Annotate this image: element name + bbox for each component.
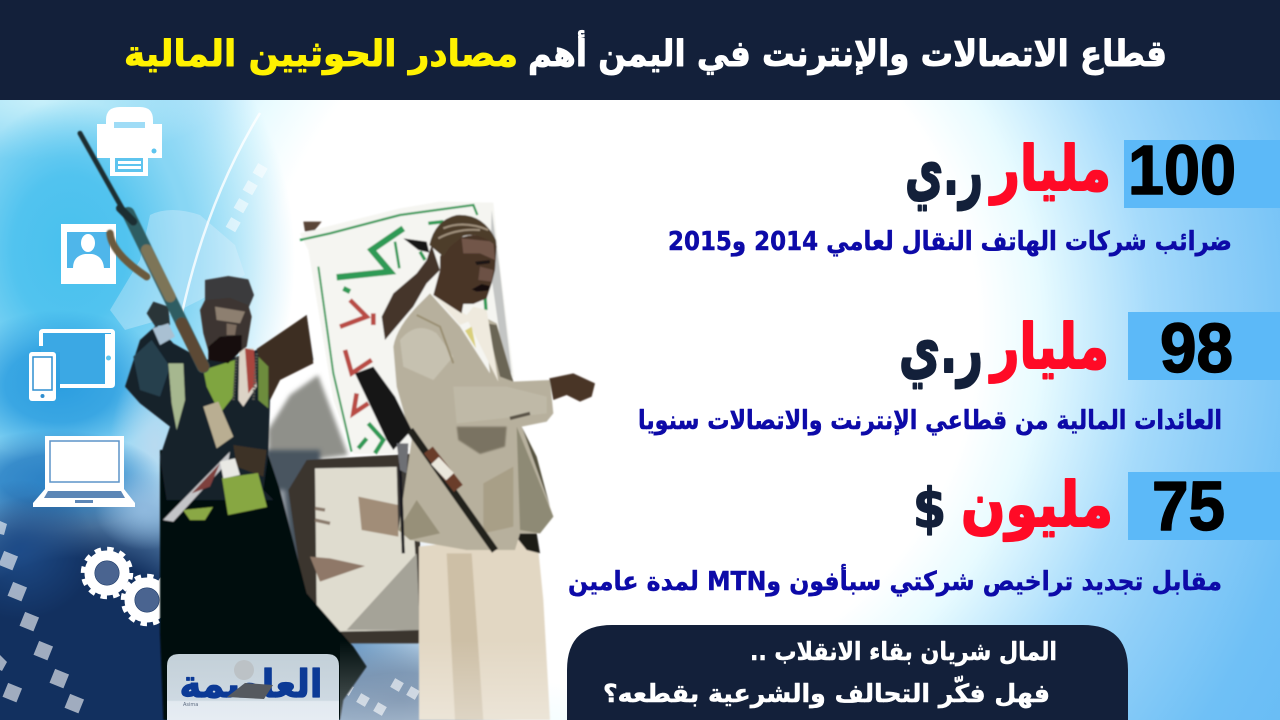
unit: ر.ي [905,132,983,211]
cap [205,276,254,308]
logo badge [167,654,339,720]
face [433,235,497,313]
torso and raised arm [125,315,313,500]
icon: photo with person [61,224,116,284]
icon: gears [84,550,170,624]
turban [429,215,497,257]
unit: مليار [989,310,1109,383]
background: pale arc and blob [110,113,260,330]
right man [355,215,595,720]
raised rifle [80,133,203,367]
title: قطاع الاتصالات والإنترنت في اليمن أهم [528,30,1167,75]
ID card [203,402,233,448]
unit: مليون [961,468,1113,541]
number box [1128,467,1280,545]
collar [433,295,498,382]
unit [899,310,1109,389]
unit: $ [913,477,946,540]
title [124,30,1167,75]
banner [300,202,514,454]
unit: مليار [989,132,1111,205]
stat 3: 75 million [568,467,1280,597]
logo text: العاصمة [180,662,322,706]
belt and sash [233,445,267,477]
callout question [567,625,1128,720]
icon: printer [97,107,162,176]
robe [419,533,550,720]
photo fade at bottom [340,640,560,720]
unit: ر.ي [899,310,983,389]
header band [0,0,1280,100]
turban tail [382,245,440,340]
description: مقابل تجديد تراخيص شركتي سبأفون وMTN لمدة عامين [568,564,1222,597]
left man [125,276,367,720]
stat 1: 100 billion [668,131,1280,257]
logo emblem [227,660,273,699]
background: left technology collage [0,100,640,720]
photo: two armed men with banner [80,133,595,720]
title: مصادر الحوثيين المالية [124,34,518,75]
hand [147,302,170,326]
description: ضرائب شركات الهاتف النقال لعامي 2014 و2015 [668,227,1232,257]
unit [913,468,1113,541]
callout text: فهل فكّر التحالف والشرعية بقطعه؟ [603,676,1050,709]
decorative film strip [0,163,420,716]
crate [288,453,420,643]
callout text [603,637,1057,709]
icons column [29,107,170,624]
unit [905,132,1111,211]
jacket [393,293,553,550]
icon: laptop [33,436,135,507]
face [200,298,252,360]
street background [265,375,348,600]
icon: tablet and phone [29,331,113,401]
shoulder rifle [355,367,412,450]
number box: 100 [1128,131,1236,209]
number box: 75 [1152,467,1225,545]
hand [549,373,595,402]
lower body [160,450,367,720]
magazine [153,323,175,345]
number box: 98 [1160,309,1233,387]
logo latin: Asima [183,702,198,708]
number box [1128,309,1280,387]
stat 2: 98 billion [638,309,1280,436]
callout text: المال شريان بقاء الانقلاب .. [750,637,1057,667]
